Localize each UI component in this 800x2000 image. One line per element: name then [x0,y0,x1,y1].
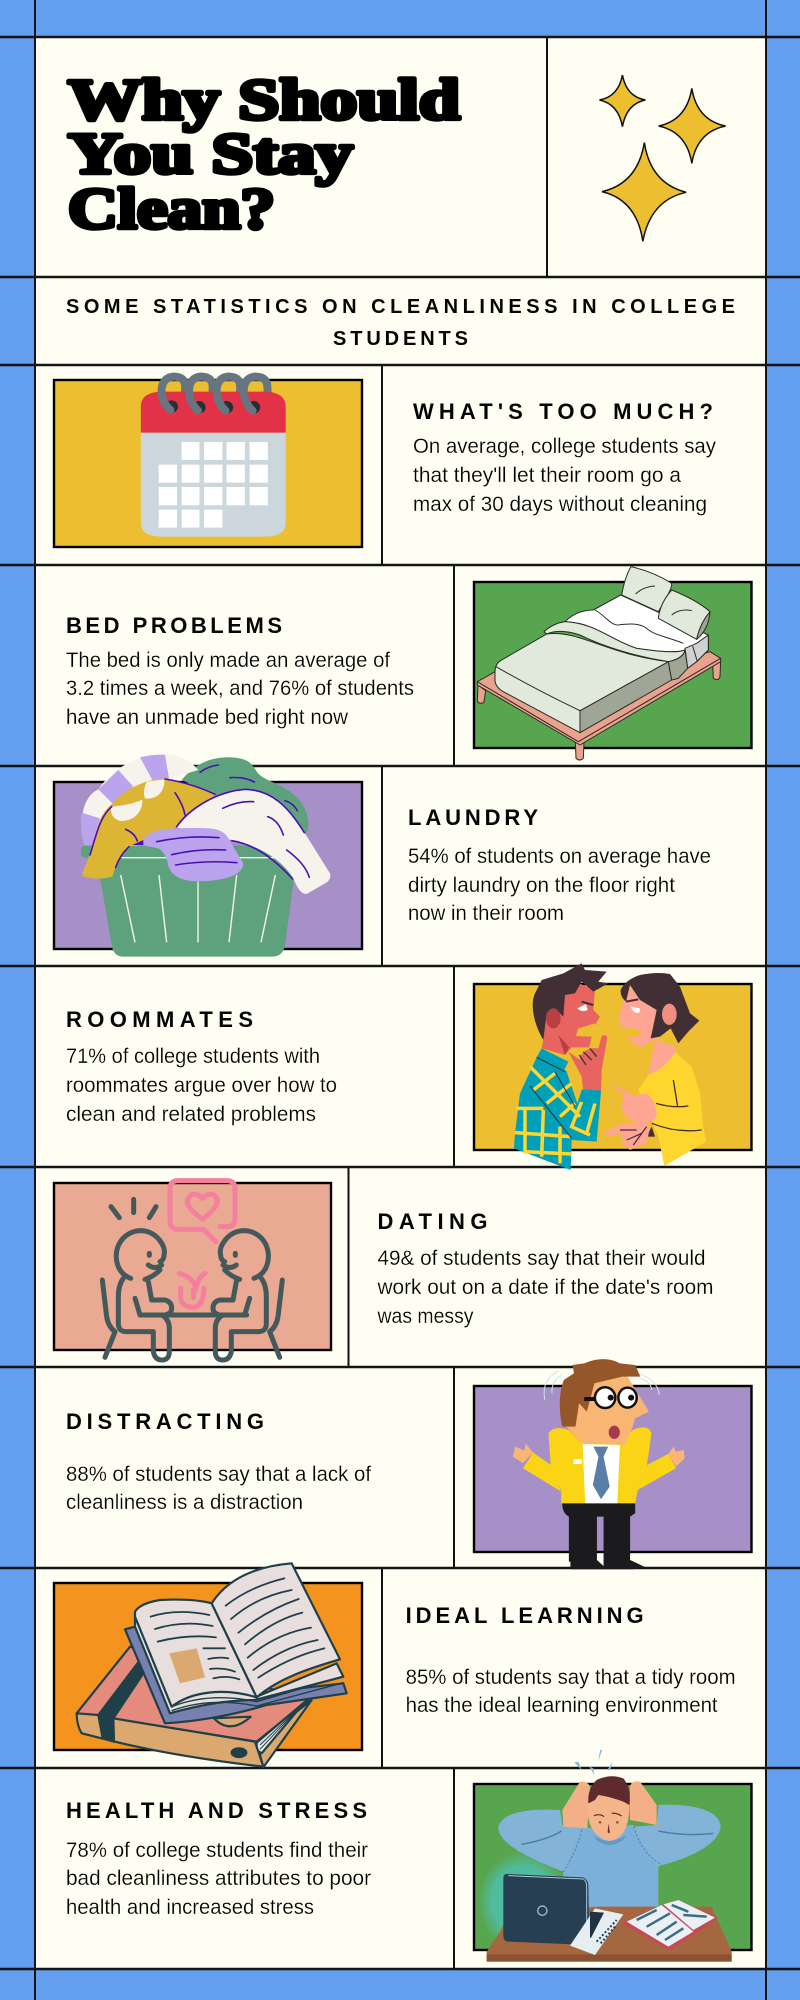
text block: The bed is only made an average of [66,649,390,672]
icon: laundry basket [81,754,330,957]
heading: DISTRACTING [66,1409,264,1434]
text block: 85% of students say that a tidy room [406,1666,736,1689]
panel: ideal learning [35,1563,766,1768]
text block: 3.2 times a week, and 76% of students [66,677,414,700]
heading: ROOMMATES [66,1007,253,1032]
icon: sparkles [599,75,726,241]
title [68,67,460,241]
subtitle: SOME STATISTICS ON CLEANLINESS IN COLLEGE [66,296,735,318]
text block: 71% of college students with [66,1045,320,1068]
title: Why Should [68,67,460,132]
subtitle: STUDENTS [333,328,468,350]
heading: BED PROBLEMS [66,613,282,638]
icon: couple on a date [102,1181,282,1360]
text block: clean and related problems [66,1103,316,1126]
text block: roommates argue over how to [66,1074,337,1097]
panel: roommates [35,963,766,1170]
text block: health and increased stress [66,1896,314,1919]
text block: have an unmade bed right now [66,706,349,729]
title: Clean? [68,176,275,241]
title: You Stay [68,121,353,186]
text block: dirty laundry on the floor right [408,874,675,897]
text block: work out on a date if the date's room [377,1276,714,1299]
heading: IDEAL LEARNING [406,1603,644,1628]
text block: cleanliness is a distraction [66,1491,303,1514]
panel: dating [35,1167,766,1367]
text block [408,845,711,925]
heading: WHAT'S TOO MUCH? [413,399,713,424]
icon: bed [477,567,721,760]
text block: now in their room [408,902,564,925]
heading: LAUNDRY [408,805,538,830]
panel: laundry [35,754,766,966]
text block [377,1247,714,1328]
text block: On average, college students say [413,435,716,458]
text block: bad cleanliness attributes to poor [66,1867,371,1890]
heading: DATING [378,1209,488,1234]
text block [66,649,414,729]
heading: HEALTH AND STRESS [66,1798,367,1823]
text block [66,1045,337,1126]
text block: 54% of students on average have [408,845,711,868]
text block: 88% of students say that a lack of [66,1463,371,1486]
icon: calendar [141,377,286,537]
text block: was messy [377,1305,474,1328]
panel: bed problems [35,565,766,766]
icon: stressed student [478,1750,732,1962]
text block: 49& of students say that their would [378,1247,706,1270]
text block [66,1839,371,1919]
icon: arguing roommates [514,963,706,1170]
icon: shocked man [513,1359,685,1569]
panel: distracting [35,1359,766,1569]
text block: max of 30 days without cleaning [413,493,707,516]
text block [66,1463,371,1514]
panel: what's too much [35,365,766,565]
text block [406,1666,736,1717]
panel: health and stress [35,1750,766,1969]
icon: books [77,1563,347,1767]
subtitle [66,296,735,350]
text block: 78% of college students find their [66,1839,368,1862]
panel: title header [35,37,766,277]
text block: that they'll let their room go a [413,464,681,487]
text block [413,435,716,516]
text block: has the ideal learning environment [406,1694,718,1717]
